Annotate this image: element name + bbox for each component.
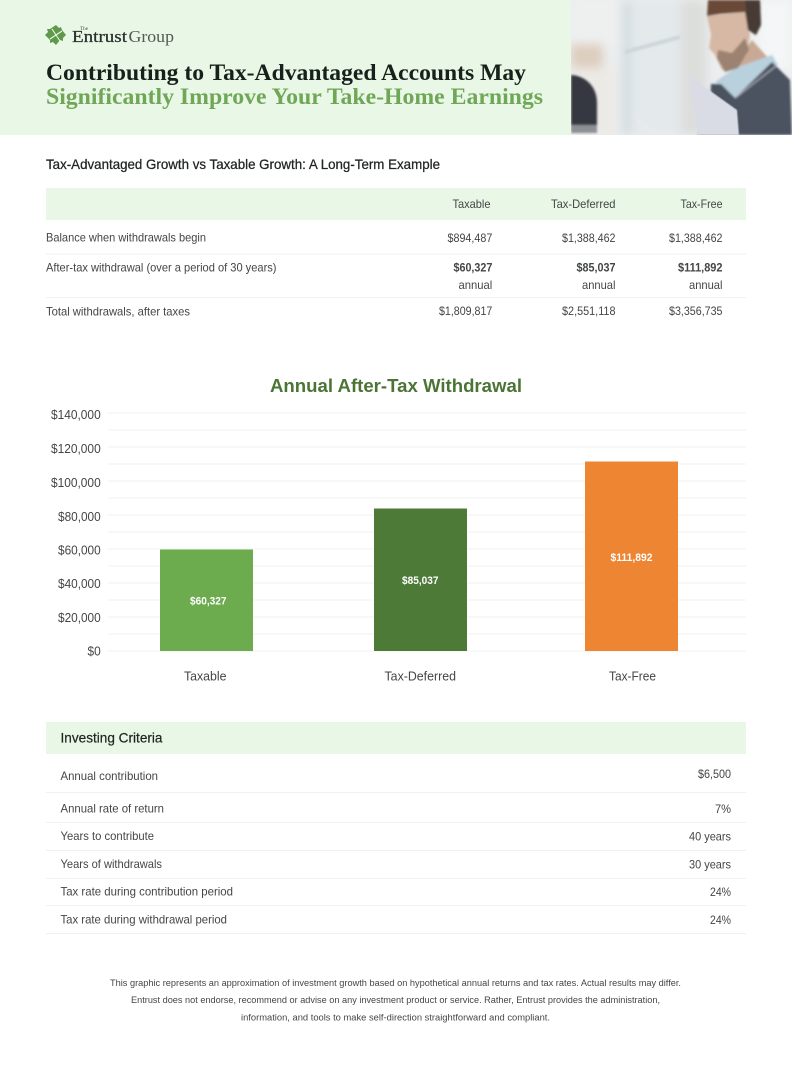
chart title: Annual After-Tax Withdrawal: [270, 375, 522, 396]
row: balance: $894,487: [448, 231, 493, 245]
row: annual rate of return: 7%: [715, 802, 731, 816]
row: total withdrawals: $2,551,118: [562, 304, 616, 318]
bar: tax-free: [585, 462, 678, 651]
row: after-tax withdrawal: annual: [582, 278, 616, 292]
row: tax rate during contribution: Tax rate during contribution period: [60, 884, 233, 898]
header background: [0, 0, 571, 135]
row: years of withdrawals: Years of withdrawals: [60, 857, 162, 871]
row: balance: Balance when withdrawals begin: [46, 230, 206, 244]
footnote disclaimer: This graphic represents an approximation of investment growth based on hypothetical annual returns and tax rates. Actual results may differ.: [110, 978, 681, 989]
row: years to contribute: [60, 829, 731, 844]
row: balance: $1,388,462: [669, 231, 723, 245]
row: tax rate during withdrawal: [60, 912, 731, 927]
row: years to contribute: Years to contribute: [60, 829, 154, 843]
row: tax rate during withdrawal: 24%: [710, 913, 731, 927]
y axis labels: [51, 407, 101, 658]
title: Significantly Improve Your Take-Home Earnings: [46, 84, 543, 110]
row: balance: [46, 230, 723, 245]
criteria header band: Investing Criteria: [60, 730, 163, 746]
row: balance: $1,388,462: [562, 231, 616, 245]
bar: taxable: $60,327: [190, 596, 226, 608]
icon: Entrust logo mark: [45, 25, 66, 45]
y axis labels: $60,000: [58, 542, 101, 558]
row: after-tax withdrawal: annual: [458, 278, 492, 292]
row: tax rate during contribution: 24%: [710, 885, 731, 899]
y axis labels: $0: [88, 644, 101, 658]
row: after-tax withdrawal: After-tax withdrawal (over a period of 30 years): [46, 260, 277, 274]
row: after-tax withdrawal: annual: [689, 278, 722, 292]
y axis labels: $140,000: [51, 407, 101, 422]
table header band: Taxable: [452, 197, 491, 211]
panel: bar chart: [51, 375, 746, 684]
criteria header band: [46, 722, 746, 754]
panel: growth comparison table: [46, 157, 746, 318]
row: tax rate during contribution: [60, 884, 731, 899]
x axis labels: Taxable: [184, 668, 226, 684]
y axis labels: $120,000: [51, 441, 101, 456]
y axis labels: $100,000: [51, 475, 101, 490]
row: annual contribution: [60, 767, 731, 783]
panel: investing criteria: [46, 722, 746, 934]
y axis labels: $20,000: [58, 610, 101, 625]
title: Contributing to Tax-Advantaged Accounts May: [46, 60, 526, 86]
row: total withdrawals: [46, 304, 723, 318]
photo: man reading a document: [571, 0, 792, 135]
x axis labels: Tax-Free: [609, 668, 656, 684]
table header band: Tax-Deferred: [551, 197, 616, 211]
bar: tax-deferred: [374, 508, 467, 651]
row: total withdrawals: $1,809,817: [439, 304, 493, 318]
row: total withdrawals: $3,356,735: [669, 304, 723, 318]
footnote disclaimer: Entrust does not endorse, recommend or advise on any investment product or service. Rather, Entrust provides the administration,: [131, 995, 660, 1006]
table header band: [46, 188, 746, 220]
row: years of withdrawals: 30 years: [689, 858, 731, 872]
bar: tax-free: $111,892: [610, 552, 652, 564]
y axis labels: $80,000: [58, 509, 101, 524]
logo wordmark: Entrust: [72, 27, 127, 46]
logo wordmark: The: [80, 27, 89, 32]
table heading: Tax-Advantaged Growth vs Taxable Growth: A Long-Term Example: [46, 157, 440, 172]
bar: tax-deferred: $85,037: [402, 575, 438, 587]
x axis labels: Tax-Deferred: [384, 668, 456, 684]
x axis labels: [184, 668, 656, 684]
footnote disclaimer: [110, 978, 681, 1024]
table header band: Tax-Free: [680, 197, 723, 211]
y axis labels: $40,000: [58, 576, 101, 591]
footnote disclaimer: information, and tools to make self-direction straightforward and compliant.: [241, 1012, 550, 1024]
panel: header: [0, 0, 792, 135]
row: annual rate of return: Annual rate of return: [60, 802, 164, 816]
title: [46, 60, 543, 110]
row: annual contribution: $6,500: [698, 767, 731, 781]
row: years to contribute: 40 years: [689, 830, 731, 844]
logo wordmark: [72, 27, 174, 46]
row: tax rate during withdrawal: Tax rate during withdrawal period: [60, 912, 227, 926]
row: after-tax withdrawal: [46, 260, 723, 292]
row: years of withdrawals: [60, 857, 731, 872]
row: after-tax withdrawal: $60,327: [454, 260, 493, 274]
row: annual rate of return: [60, 802, 731, 816]
bar: taxable: [160, 550, 253, 651]
row: total withdrawals: Total withdrawals, after taxes: [46, 304, 190, 318]
logo wordmark: Group: [128, 27, 174, 46]
row: annual contribution: Annual contribution: [60, 769, 158, 783]
row: after-tax withdrawal: $111,892: [678, 260, 723, 274]
row: after-tax withdrawal: $85,037: [576, 260, 616, 274]
